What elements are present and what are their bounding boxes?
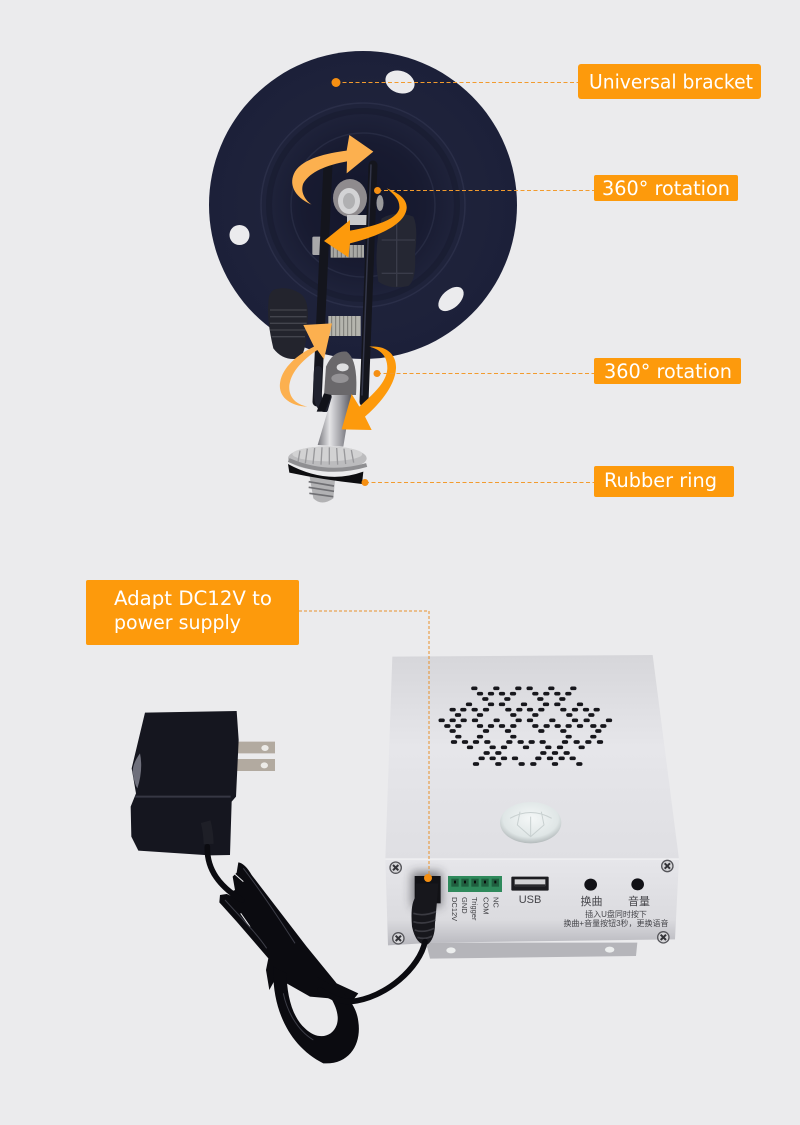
label: lower rotation: 360° rotation xyxy=(604,360,732,383)
bracket arms xyxy=(317,165,373,408)
mounting disc xyxy=(209,51,517,359)
cable runs xyxy=(207,847,425,1002)
label: universal bracket: Universal bracket xyxy=(589,70,753,94)
callout: universal bracket xyxy=(332,64,761,99)
strain relief xyxy=(206,822,209,844)
panel buttons xyxy=(584,878,644,891)
upper ball joint xyxy=(333,179,384,225)
rotation arrow: lower light xyxy=(280,323,332,407)
panel labels: USB xyxy=(519,894,541,906)
leader dot: power supply xyxy=(424,874,432,882)
speaker grille holes xyxy=(440,688,610,764)
device top face xyxy=(385,655,679,859)
label: upper rotation: 360° rotation xyxy=(602,177,730,200)
panel labels: 音量 xyxy=(628,894,650,908)
lower ball joint and shaft xyxy=(317,352,356,447)
panel labels xyxy=(519,894,669,928)
USB port xyxy=(511,877,549,891)
terminal labels: NC xyxy=(492,897,500,908)
speaker device xyxy=(385,655,679,959)
rotation arrow: top dark xyxy=(324,188,407,257)
universal bracket photo xyxy=(209,51,517,502)
panel screws xyxy=(390,860,673,944)
terminal labels: Trigger xyxy=(470,897,479,921)
leader dot: upper rotation xyxy=(374,187,381,194)
label: universal bracket xyxy=(578,64,761,99)
label: rubber ring xyxy=(594,466,734,497)
upper threaded bolt xyxy=(312,237,364,258)
power adapter xyxy=(131,711,425,1063)
rubber ring thumb screw xyxy=(288,446,367,502)
label: power supply xyxy=(86,580,299,645)
mounting flange xyxy=(426,943,637,959)
lower threaded bolt xyxy=(328,316,361,336)
label: power supply: power supply xyxy=(114,611,241,634)
PIR motion sensor dome xyxy=(500,802,561,843)
panel labels: 换曲 xyxy=(580,894,602,908)
leader line: upper rotation xyxy=(378,190,594,192)
leader dot: universal bracket xyxy=(332,78,340,87)
panel labels: 换曲+音量按钮3秒，更换语音 xyxy=(563,918,669,928)
rotation arrow: lower dark xyxy=(342,346,396,430)
leader line: lower rotation xyxy=(377,372,594,374)
adapter cable and coil xyxy=(206,822,425,1063)
callout: adapt DC12V power supply xyxy=(86,580,432,882)
callout: rubber ring xyxy=(362,466,734,497)
callout: upper 360 rotation xyxy=(374,175,738,201)
label: power supply: Adapt DC12V to xyxy=(114,587,272,610)
device front panel xyxy=(385,859,679,945)
power connector plug xyxy=(411,876,441,945)
strand bundle xyxy=(219,862,358,1004)
terminal labels: COM xyxy=(482,897,490,914)
callout: lower 360 rotation xyxy=(374,358,741,384)
terminal labels xyxy=(450,897,500,921)
panel labels: 插入U盘同时按下 xyxy=(585,909,647,919)
left adjustment knob xyxy=(268,288,308,359)
plug shadow xyxy=(412,872,442,907)
bundle gaps xyxy=(225,873,250,927)
leader line: power supply xyxy=(299,611,429,878)
terminal labels: DC12V xyxy=(450,897,459,921)
leader dot: lower rotation xyxy=(374,370,380,377)
adapter prongs xyxy=(236,742,275,771)
coil loop xyxy=(273,967,359,1063)
terminal block xyxy=(448,876,502,892)
right adjustment knob xyxy=(376,214,416,287)
leader dot: rubber ring xyxy=(362,479,368,486)
adapter body xyxy=(131,711,239,855)
leader line: universal bracket xyxy=(336,82,578,84)
strand highlights xyxy=(225,868,313,1040)
terminal labels: GND xyxy=(460,897,469,914)
leader line: rubber ring xyxy=(365,482,594,484)
label: rubber ring: Rubber ring xyxy=(604,469,717,492)
rotation arrow: top light xyxy=(292,135,373,205)
